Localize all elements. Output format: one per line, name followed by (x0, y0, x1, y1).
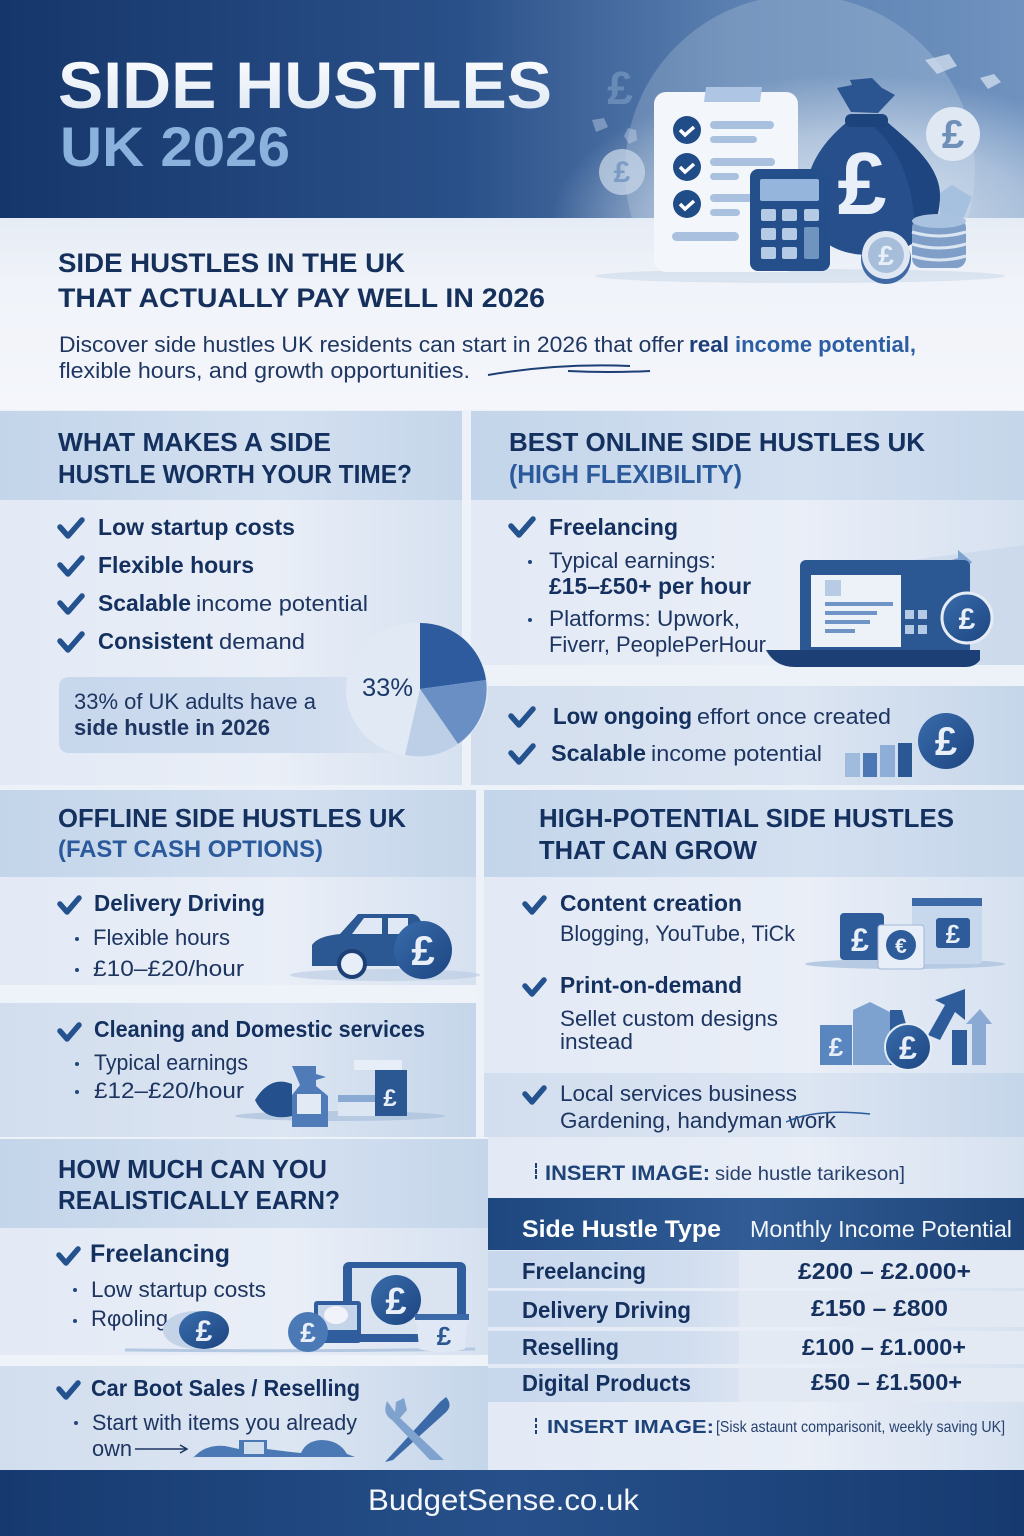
row: delivery driving (488, 1291, 1024, 1327)
icon: folders and coins: £ (946, 919, 961, 949)
image placeholder note: INSERT IMAGE: (545, 1162, 710, 1185)
panel: best online side hustles (471, 411, 1024, 667)
footer (0, 1470, 1024, 1536)
freelancing earnings: Rφoling (91, 1306, 168, 1331)
icon: car boot items and tools (193, 1397, 450, 1462)
panel: scalable online income: Low ongoing (553, 703, 692, 729)
row: reselling: £100 – £1.000+ (802, 1334, 966, 1360)
car boot sales: Start with items you already (92, 1410, 357, 1435)
heading: HUSTLE WORTH YOUR TIME? (58, 459, 412, 489)
intro panel (0, 218, 1024, 410)
coin (861, 231, 911, 284)
heading: HIGH-POTENTIAL SIDE HUSTLES (539, 803, 954, 833)
checklist: income potential (196, 591, 368, 616)
pie chart: 33% (346, 623, 488, 757)
freelancing list: Freelancing (549, 514, 678, 540)
icon: laptop with pound coin: £ (959, 603, 976, 636)
icon: cleaning supplies (235, 1060, 445, 1127)
panel: scalable online income: income potential (651, 741, 822, 766)
icon: delivery car with coin (290, 914, 480, 981)
heading (0, 1139, 488, 1228)
faded coins (599, 62, 980, 195)
pie chart: 33%: 33% (362, 674, 413, 702)
row: digital products: Digital Products (522, 1370, 691, 1396)
footer: BudgetSense.co.uk (368, 1484, 640, 1517)
calculator (750, 169, 830, 271)
delivery driving: Flexible hours (93, 925, 230, 950)
heading: HOW MUCH CAN YOU (58, 1154, 327, 1184)
money bag (806, 78, 940, 255)
freelancing list: Platforms: Upwork, (549, 606, 740, 631)
row: freelancing (488, 1251, 1024, 1288)
checklist: Scalable (98, 590, 191, 616)
intro text: income potential, (735, 332, 916, 357)
row: digital products: £50 – £1.500+ (811, 1369, 962, 1395)
cleaning and domestic services: Typical earnings (94, 1050, 248, 1075)
hero illustration: clipboard, calculator, money bag, coins (595, 62, 1005, 284)
image placeholder note: INSERT IMAGE: (547, 1417, 714, 1437)
row: digital products (488, 1368, 1024, 1402)
freelancing earnings (59, 1240, 266, 1331)
icon: folders and coins: € (895, 935, 907, 958)
faded coins: £ (614, 156, 631, 189)
money bag: £ (838, 134, 887, 233)
icon: laptop with coins: £ (300, 1317, 316, 1348)
title: UK 2026 (60, 115, 290, 178)
checklist: demand (219, 629, 305, 654)
print-on-demand (525, 972, 778, 1054)
checklist: Consistent (98, 628, 213, 654)
image placeholder note (536, 1417, 1005, 1437)
header banner (0, 0, 1024, 218)
icon: growth chart and coins: £ (829, 1032, 844, 1062)
clipboard (654, 87, 798, 272)
row: delivery driving: £150 – £800 (811, 1295, 948, 1321)
panel: scalable online income: effort once created (697, 704, 891, 729)
local services business: Local services business (560, 1081, 797, 1106)
intro text: Discover side hustles UK residents can start in 2026 that offer (59, 332, 684, 357)
panel: high-potential side hustles (484, 790, 1024, 1137)
icon: bars with pound coin: £ (935, 720, 957, 764)
panel: how much can you realistically earn (0, 1139, 488, 1470)
heading: WHAT MAKES A SIDE (58, 427, 331, 457)
checklist: Low startup costs (98, 514, 295, 540)
image placeholder note (488, 1137, 1024, 1198)
intro text (59, 332, 916, 383)
panel: offline side hustles (0, 790, 480, 1137)
icon: laptop with coins: £ (385, 1281, 407, 1323)
panel: scalable online income: Scalable (551, 740, 646, 766)
faded coins: £ (942, 113, 964, 157)
heading: REALISTICALLY EARN? (58, 1185, 340, 1215)
content creation: Content creation (560, 890, 742, 916)
icon: delivery car with coin: £ (411, 927, 435, 974)
icon: laptop with coins: £ (437, 1321, 452, 1351)
freelancing list: Typical earnings: (549, 548, 716, 573)
statistic callout: side hustle in 2026 (74, 715, 270, 740)
icon: laptop with pound coin (766, 545, 1024, 667)
freelancing earnings: Freelancing (90, 1240, 230, 1268)
icon: growth chart and coins: £ (899, 1030, 917, 1066)
row: reselling (488, 1331, 1024, 1364)
freelancing list: Fiverr, PeoplePerHour (549, 632, 766, 657)
heading (0, 411, 462, 500)
icon: folders and coins: £ (851, 922, 869, 958)
panel: what makes a side hustle worth your time (0, 411, 462, 785)
car boot sales: own (92, 1436, 132, 1461)
heading: (FAST CASH OPTIONS) (58, 836, 323, 863)
panel: scalable online income (471, 686, 1024, 785)
heading: THAT CAN GROW (539, 835, 757, 865)
table header (522, 1216, 1012, 1243)
content creation: Blogging, YouTube, TiCk (560, 921, 796, 946)
intro heading (58, 248, 545, 313)
heading (471, 411, 1024, 500)
intro text: flexible hours, and growth opportunities. (59, 358, 470, 383)
print-on-demand: Sellet custom designs (560, 1006, 778, 1031)
local services business (484, 1073, 1024, 1137)
icon: laptop with coins: £ (196, 1315, 213, 1348)
row: freelancing: Freelancing (522, 1258, 646, 1284)
icon: bars with pound coin (845, 713, 974, 777)
content creation (525, 890, 796, 946)
car boot sales: Car Boot Sales / Reselling (91, 1375, 360, 1401)
coin stack (912, 185, 972, 268)
table header: Side Hustle Type (522, 1216, 721, 1243)
cleaning and domestic services: Cleaning and Domestic services (94, 1016, 425, 1042)
heading (0, 790, 476, 877)
icon: growth chart and coins (820, 989, 992, 1070)
icon: folders and coins (805, 898, 1005, 969)
local services business: Gardening, handyman work (560, 1108, 837, 1133)
table header: Monthly Income Potential (750, 1216, 1012, 1242)
row: freelancing: £200 – £2.000+ (798, 1258, 971, 1284)
checklist: Flexible hours (98, 552, 254, 578)
income table (488, 1198, 1024, 1470)
freelancing list (511, 514, 766, 657)
heading: (HIGH FLEXIBILITY) (509, 459, 742, 489)
intro heading: SIDE HUSTLES IN THE UK (58, 248, 406, 278)
row: reselling: Reselling (522, 1334, 619, 1360)
freelancing list: £15–£50+ per hour (549, 573, 751, 599)
image placeholder note: side hustle tarikeson] (715, 1164, 905, 1185)
intro text: real (689, 332, 729, 357)
delivery driving: Delivery Driving (94, 890, 265, 916)
coin: £ (878, 240, 894, 271)
intro heading: THAT ACTUALLY PAY WELL IN 2026 (58, 283, 545, 313)
cleaning and domestic services: £12–£20/hour (94, 1078, 244, 1103)
print-on-demand: Print-on-demand (560, 972, 742, 998)
delivery driving: £10–£20/hour (93, 956, 244, 981)
heading: OFFLINE SIDE HUSTLES UK (58, 803, 406, 833)
faded coins: £ (607, 62, 633, 114)
statistic callout (59, 677, 400, 753)
heading: BEST ONLINE SIDE HUSTLES UK (509, 427, 925, 457)
cleaning and domestic services (0, 985, 476, 1137)
title: SIDE HUSTLES (58, 48, 552, 122)
print-on-demand: instead (560, 1029, 633, 1054)
delivery driving (60, 890, 265, 981)
icon: laptop with coins (0, 1262, 488, 1366)
title (58, 48, 552, 178)
heading (484, 790, 1024, 877)
freelancing earnings: Low startup costs (91, 1277, 266, 1302)
car boot sales (0, 1366, 488, 1470)
icon: cleaning supplies: £ (383, 1085, 397, 1112)
checklist (60, 514, 368, 654)
statistic callout: 33% of UK adults have a (74, 689, 317, 714)
row: delivery driving: Delivery Driving (522, 1297, 691, 1323)
